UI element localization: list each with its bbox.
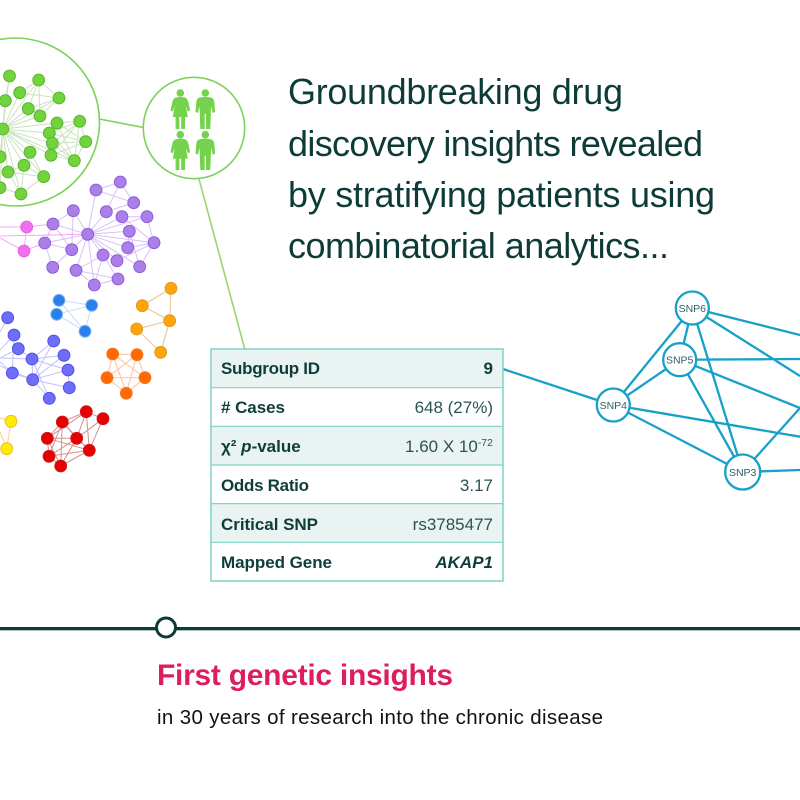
insight heading: First genetic insights [157, 659, 453, 692]
headline: combinatorial analytics... [288, 225, 669, 266]
row: cases [221, 398, 493, 417]
headline: discovery insights revealed [288, 123, 703, 164]
row: p-value [221, 437, 493, 456]
row: mapped gene [221, 553, 493, 572]
row: critical snp [221, 515, 493, 534]
indigo cluster [0, 312, 75, 404]
amber cluster [131, 282, 177, 358]
SNP network [597, 292, 800, 490]
row: subgroup id [221, 359, 493, 378]
yellow cluster [0, 415, 17, 455]
purple cluster [39, 176, 160, 291]
node SNP4: SNP4 [600, 400, 627, 412]
row: critical snp: Critical SNP [221, 515, 318, 534]
node SNP6 [676, 292, 709, 324]
row: critical snp: rs3785477 [413, 515, 493, 534]
row: mapped gene: Mapped Gene [221, 553, 332, 572]
insight subtext: in 30 years of research into the chronic disease [157, 706, 603, 729]
node SNP3: SNP3 [729, 467, 757, 479]
node SNP6: SNP6 [679, 303, 706, 315]
node SNP4 [597, 388, 630, 422]
timeline [0, 618, 800, 637]
headline: Groundbreaking drug [288, 71, 623, 112]
subgroup data table [211, 349, 503, 581]
row: p-value: 1.60 X 10 [405, 437, 478, 456]
connector: table to SNP network [503, 369, 597, 400]
orange cluster [101, 348, 151, 399]
node SNP5: SNP5 [666, 355, 694, 367]
row: p-value: -72 [478, 437, 493, 449]
headline: by stratifying patients using [288, 174, 715, 215]
row: subgroup id: 9 [484, 359, 493, 378]
patient subgroup circle with people icons [143, 77, 245, 179]
row: odds ratio: Odds Ratio [221, 476, 309, 495]
node SNP5 [663, 343, 696, 376]
green cluster callout circle [0, 38, 100, 206]
row: cases: 648 (27%) [415, 398, 493, 417]
red cluster [41, 406, 109, 472]
pink cluster [0, 221, 88, 257]
node SNP3 [725, 454, 760, 490]
headline [288, 71, 715, 266]
row: odds ratio: 3.17 [460, 476, 493, 495]
blue cluster [51, 294, 98, 337]
connector: patient circle to table [199, 179, 245, 350]
row: mapped gene: AKAP1 [434, 553, 493, 572]
row: cases: # Cases [221, 398, 285, 417]
row: subgroup id: Subgroup ID [221, 359, 320, 378]
row: odds ratio [221, 476, 493, 495]
connector: cluster to patient circle [100, 119, 144, 128]
row: p-value: χ² p-value [221, 437, 301, 456]
